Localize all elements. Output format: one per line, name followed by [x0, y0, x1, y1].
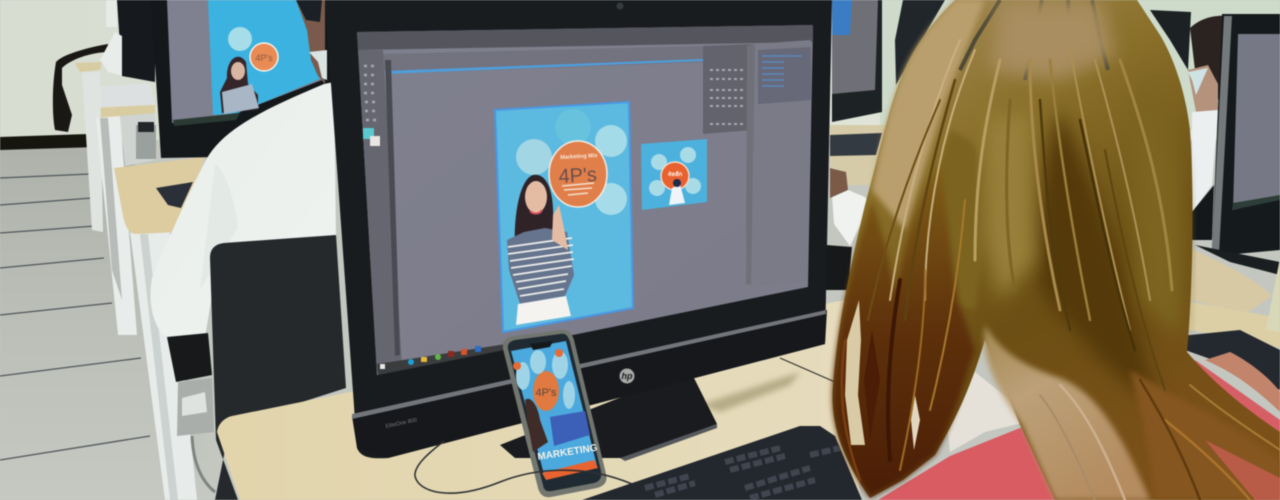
hand and cuff: [832, 168, 870, 246]
crown lighter streak: [990, 0, 1115, 80]
office chair: [167, 235, 346, 500]
student with long blonde hair, back view: [832, 0, 1280, 500]
HP logo: [620, 368, 634, 384]
right background: monitor, keyboard, colleagues: [826, 0, 1280, 390]
chrome bracket: [177, 378, 214, 436]
dark left lock: [832, 160, 975, 498]
right desk: [1180, 300, 1280, 348]
smartphone: MARKETING: [537, 443, 598, 463]
charging cable: [415, 441, 632, 493]
left monitor with poster: [151, 0, 335, 158]
second desk leg: [130, 232, 197, 500]
distant person white sleeve: [100, 32, 122, 76]
small chrome stand: [136, 125, 156, 159]
screen: [357, 25, 813, 375]
background monitor center right: [832, 0, 882, 122]
app toolbar: [357, 25, 813, 50]
stand: [500, 370, 717, 458]
hair strands: [842, 40, 1280, 500]
bubbles: [516, 139, 552, 175]
lower chin: [352, 310, 827, 458]
smartphone: [503, 330, 607, 497]
rust lower right: [1130, 370, 1280, 500]
far desk and keyboard: [830, 125, 885, 185]
orange badge: Marketing Mix: [560, 153, 599, 161]
orange badge: [549, 141, 607, 207]
bottle: [1266, 258, 1280, 332]
silver stripe: [352, 310, 826, 419]
tab bar: [382, 46, 703, 74]
woman with striped top: [507, 175, 574, 325]
head and mask: [296, 0, 325, 84]
properties panels: [703, 44, 753, 134]
far desks and equipment, left: [53, 0, 205, 500]
poster artboard: [495, 102, 633, 332]
right keyboard: [1180, 330, 1280, 390]
windows taskbar: [377, 338, 545, 375]
hair mass: [832, 0, 1280, 500]
tool panel: [358, 50, 402, 372]
webcam: [616, 2, 624, 10]
floor: [0, 146, 220, 500]
pink top: [878, 424, 1110, 500]
baseboard: [0, 134, 88, 152]
hanging strap: [53, 44, 110, 132]
tan cloth: [1180, 246, 1272, 314]
small infographic artboard: 4หลัก: [668, 170, 683, 178]
shirt: [151, 82, 336, 337]
armrest: [167, 333, 212, 382]
highlight gaps in lock: [845, 300, 865, 445]
front keyboard: [582, 426, 862, 500]
HP logo: hp: [622, 371, 633, 381]
small infographic artboard: [641, 139, 707, 210]
monitor shadow: [700, 372, 800, 412]
distant desk top: [75, 62, 102, 72]
white collar: [948, 372, 1022, 452]
colleague on the right: [1190, 16, 1238, 108]
monitor back: [895, 0, 945, 85]
third desk legs: [82, 72, 103, 232]
smartphone: 4P's: [535, 387, 557, 399]
main desk: [217, 300, 860, 500]
wall: [0, 0, 1280, 140]
distant monitor: [117, 0, 155, 82]
olive shaded centre: [1038, 110, 1160, 410]
third desk: [84, 83, 155, 116]
small keyboard: [156, 182, 193, 208]
seated colleague in white shirt: [151, 0, 336, 337]
bezel: [325, 0, 832, 458]
poster on left screen: [208, 0, 322, 115]
model label: EliteOne 800: [385, 417, 418, 430]
pale blonde lock: [984, 325, 1150, 500]
phone screen content: [511, 341, 597, 478]
dark root parting: [960, 0, 1108, 80]
poster on left screen: 4P's: [255, 53, 273, 63]
second desk top: [114, 157, 205, 234]
right monitor: [1212, 14, 1280, 255]
mid golden band: [985, 110, 1035, 300]
main monitor: [325, 0, 832, 461]
light left crown: [872, 0, 985, 230]
orange badge: 4P's: [558, 164, 597, 188]
